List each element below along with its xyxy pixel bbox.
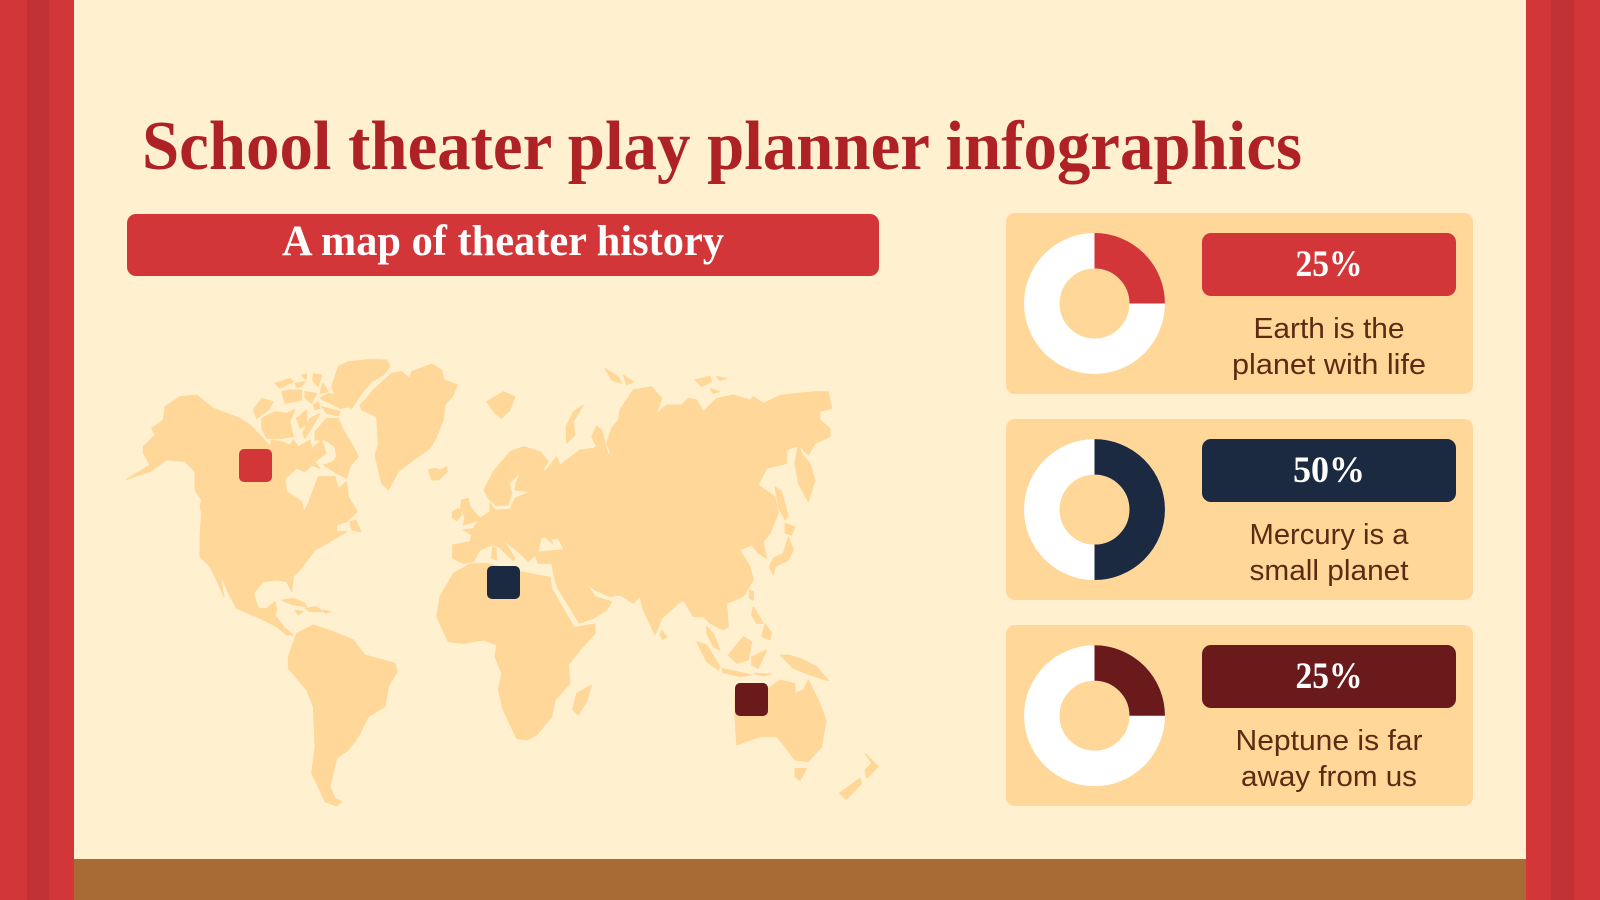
world map <box>127 359 878 806</box>
label: 25% <box>1202 645 1456 708</box>
left curtain <box>0 0 74 900</box>
description: planet with life <box>1232 349 1426 381</box>
description <box>1232 313 1426 381</box>
label: 25%: 25% <box>1296 244 1362 285</box>
map heading: A map of theater history <box>282 218 724 265</box>
title: School theater play planner infographics <box>142 108 1302 185</box>
arctic canada, greenland and iceland <box>253 359 457 490</box>
marker: north america <box>239 449 272 482</box>
description <box>1250 519 1409 587</box>
label: 50% <box>1202 439 1456 502</box>
description <box>1236 725 1423 793</box>
floor <box>74 859 1526 900</box>
donut: 25% red <box>1042 251 1147 356</box>
label: 25%: 25% <box>1296 656 1362 697</box>
description: Mercury is a <box>1250 519 1409 551</box>
panel: earth <box>1006 213 1473 394</box>
description: Earth is the <box>1254 313 1404 345</box>
panel: mercury <box>1006 419 1473 600</box>
eurasia, africa and oceania <box>437 368 878 799</box>
description: small planet <box>1250 555 1409 587</box>
panel: neptune <box>1006 625 1473 806</box>
map heading <box>127 214 879 276</box>
marker: australia <box>735 683 768 716</box>
donut: 25% maroon <box>1042 663 1147 768</box>
marker: north africa <box>487 566 520 599</box>
americas <box>127 395 397 806</box>
description: away from us <box>1241 761 1417 793</box>
donut: 50% navy <box>1042 457 1147 562</box>
right curtain <box>1526 0 1600 900</box>
label: 25% <box>1202 233 1456 296</box>
label: 50%: 50% <box>1293 450 1365 491</box>
description: Neptune is far <box>1236 725 1423 757</box>
